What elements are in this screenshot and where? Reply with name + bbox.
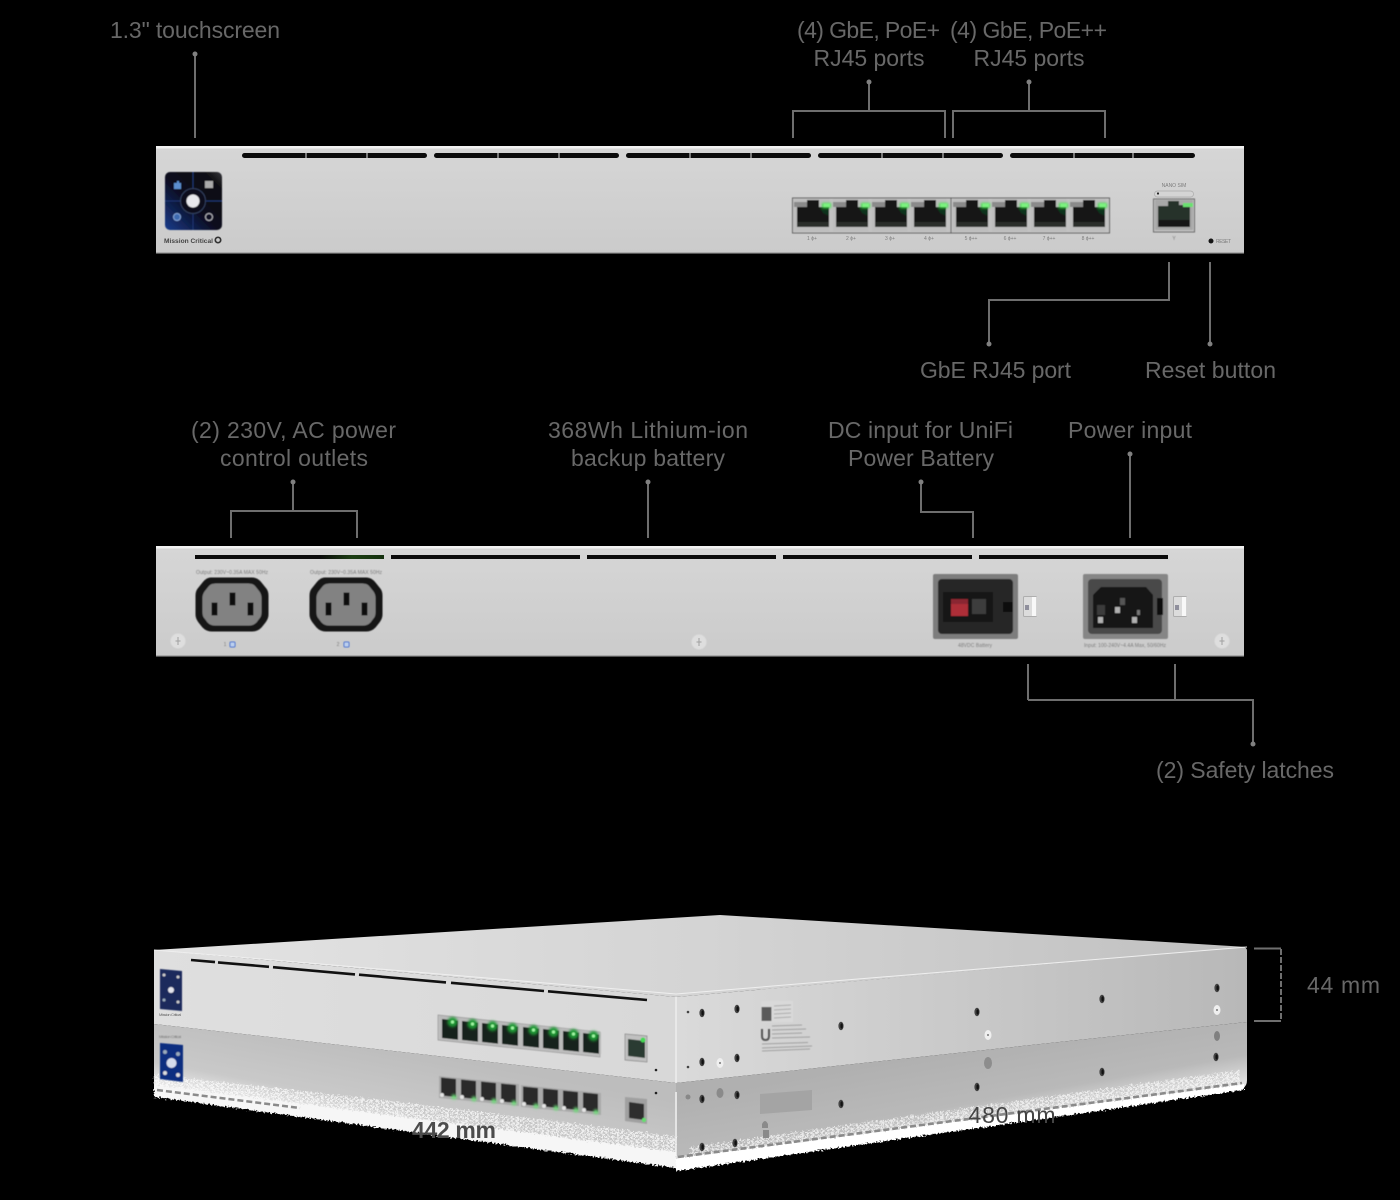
reflection dithered transition	[154, 1070, 1244, 1171]
callout: DC input: DC input for UniFi	[828, 417, 1013, 443]
dimension: 44 mm: 44 mm	[1307, 972, 1380, 998]
port numbers: 3 ϕ+	[885, 236, 895, 242]
callout: safety latches	[1028, 664, 1334, 783]
port numbers	[807, 236, 1094, 242]
product label	[761, 1001, 812, 1051]
reflection dashed edge	[157, 1083, 1242, 1157]
iso brand text: Mission Critical	[159, 1012, 181, 1017]
side face	[676, 947, 1247, 1083]
front face	[154, 950, 676, 1083]
rear vents	[195, 555, 1168, 559]
AC outlet 1: 1	[224, 642, 227, 648]
reflection ports	[439, 1076, 647, 1124]
isometric device	[154, 915, 1247, 1083]
iso touchscreen	[160, 969, 182, 1011]
power safety latch	[1174, 596, 1186, 616]
AC outlet 2: 2	[337, 642, 340, 648]
callout: PoE+ ports	[793, 17, 945, 138]
AC outlet 2: Output: 230V~0.35A MAX 50Hz	[310, 570, 382, 576]
port numbers: 2 ϕ+	[846, 236, 856, 242]
dimension: 442 mm: 442 mm	[412, 1117, 496, 1143]
single RJ45 port	[1154, 199, 1194, 242]
dimension: 44 mm	[1254, 948, 1380, 1021]
callout: PoE++ ports: RJ45 ports	[974, 45, 1084, 71]
reset button: RESET	[1216, 239, 1231, 245]
iso uplink port	[625, 1034, 647, 1062]
DC battery input: 48VDC Battery	[958, 643, 992, 649]
AC outlet 1	[196, 570, 268, 648]
nano SIM slot: NANO SIM	[1162, 183, 1186, 189]
rear screws	[170, 634, 1230, 650]
reflection touchscreen: Mission Critical	[159, 1034, 181, 1039]
callout: PoE++ ports	[950, 17, 1107, 138]
reflection side face	[676, 1022, 1247, 1170]
iso reset	[655, 1069, 657, 1071]
reflection front face	[154, 1024, 676, 1158]
callout: DC input	[828, 417, 1013, 538]
reflection	[154, 1022, 1247, 1171]
callout: PoE++ ports: (4) GbE, PoE++	[950, 17, 1107, 43]
nano SIM slot	[1154, 183, 1194, 197]
callout: reset button: Reset button	[1145, 357, 1276, 383]
port numbers: 1 ϕ+	[807, 236, 817, 242]
port numbers: 7 ϕ++	[1043, 236, 1055, 242]
front panel	[156, 146, 1244, 254]
reset button	[1208, 238, 1231, 245]
rear panel	[156, 546, 1244, 656]
port numbers: 8 ϕ++	[1082, 236, 1094, 242]
callout: GbE RJ45 port	[920, 262, 1169, 383]
callout: PoE+ ports: (4) GbE, PoE+	[797, 17, 940, 43]
Mission Critical mark: Mission Critical	[164, 238, 213, 245]
mission critical icon	[215, 237, 221, 243]
callout: AC power outlets: control outlets	[220, 445, 368, 471]
callout: power input	[1068, 417, 1193, 538]
reflection touchscreen	[159, 1034, 183, 1082]
iso side holes	[687, 984, 1220, 1068]
callout: AC power outlets	[191, 417, 396, 538]
AC outlet 1: Output: 230V~0.35A MAX 50Hz	[196, 570, 268, 576]
iso port block	[438, 1015, 601, 1057]
touchscreen	[165, 172, 222, 230]
AC outlet 2	[310, 570, 382, 648]
DC battery input	[933, 574, 1018, 649]
AC power input: Input: 100-240V~4.4A Max, 50/60Hz	[1084, 643, 1166, 649]
top face	[154, 915, 1247, 997]
battery safety latch	[1024, 596, 1036, 616]
callout: 1.3 inch touchscreen: 1.3" touchscreen	[110, 17, 280, 43]
port numbers: 4 ϕ+	[924, 236, 934, 242]
callout: PoE+ ports: RJ45 ports	[814, 45, 924, 71]
callout: backup battery	[548, 417, 748, 538]
callout: backup battery: backup battery	[571, 445, 726, 471]
reflection side details	[655, 1031, 1220, 1151]
AC power input	[1083, 574, 1168, 649]
callout: safety latches: (2) Safety latches	[1156, 757, 1334, 783]
single RJ45 port: Y	[1172, 236, 1176, 242]
port numbers: 5 ϕ++	[965, 236, 977, 242]
front vents	[242, 153, 1195, 158]
callout: AC power outlets: (2) 230V, AC power	[191, 417, 396, 443]
callout: backup battery: 368Wh Lithium-ion	[548, 417, 748, 443]
callout: power input: Power input	[1068, 417, 1193, 443]
dimension: 480 mm: 480 mm	[968, 1102, 1056, 1128]
callout: DC input: Power Battery	[848, 445, 994, 471]
callout: reset button	[1145, 262, 1276, 383]
callout: 1.3 inch touchscreen	[110, 17, 280, 138]
iso vents	[191, 960, 647, 1000]
RJ45 port block	[792, 198, 1110, 233]
port numbers: 6 ϕ++	[1004, 236, 1016, 242]
callout: GbE RJ45 port: GbE RJ45 port	[920, 357, 1072, 383]
